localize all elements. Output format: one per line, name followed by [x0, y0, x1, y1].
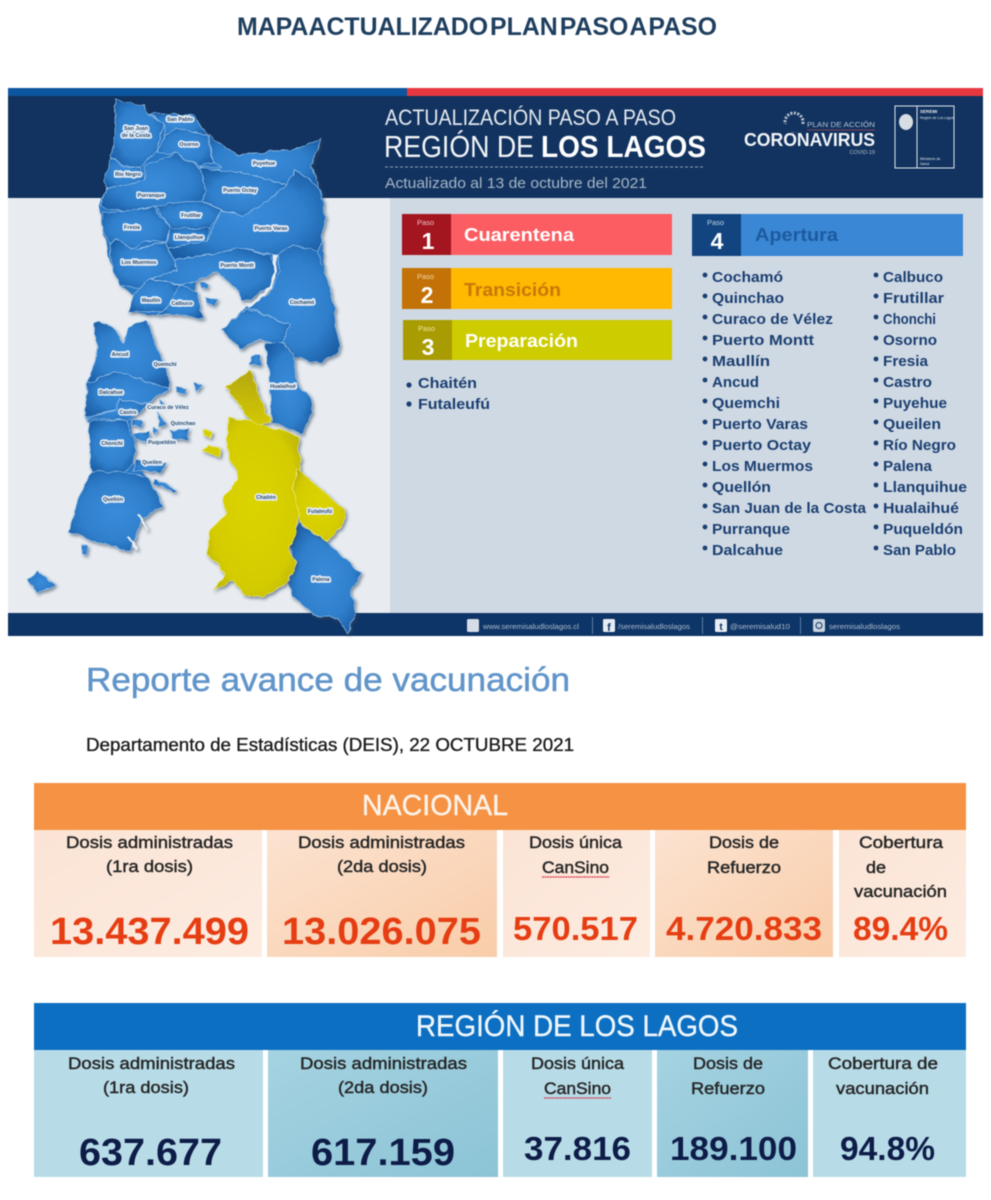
- list: comunas en paso 4, columna 1: Puerto Octay: [712, 437, 812, 454]
- map: commune labels: Puerto Montt: [220, 263, 254, 269]
- footer: redes sociales: @seremisalud10: [730, 624, 790, 631]
- map: commune labels: Los Muermos: [121, 260, 157, 266]
- panel: región de los lagos: [34, 1003, 966, 1177]
- heading: actualización paso a paso: [384, 105, 706, 192]
- banner backgrounds: [8, 88, 983, 636]
- stat: cansino región: 37.816: [524, 1130, 631, 1167]
- heading: actualización paso a paso: LOS LAGOS: [541, 129, 706, 164]
- step: paso 4 apertura: 4: [711, 228, 724, 254]
- map: commune labels: Quellón: [103, 497, 123, 503]
- list: comunas en paso 3: Chaitén: [418, 375, 477, 392]
- logo: plan de acción coronavirus: CORONAVIRUS: [744, 130, 875, 150]
- stat: cansino región: Dosis única: [531, 1054, 625, 1073]
- stat: cansino nacional: 570.517: [513, 910, 638, 947]
- map: northern communes, blue: [98, 100, 340, 363]
- map: commune labels: Fresia: [124, 225, 141, 231]
- step: paso 3 preparación: 3: [422, 334, 434, 360]
- list: comunas en paso 3: [406, 375, 490, 413]
- step: paso 2 transición: Paso: [417, 272, 434, 281]
- stat: dosis 1ra región: Dosis administradas: [68, 1054, 235, 1073]
- logo: seremi de salud: Ministerio de: [920, 157, 940, 161]
- stat: dosis 1ra nacional: Dosis administradas: [66, 833, 233, 852]
- logo: seremi de salud: [895, 106, 954, 168]
- map: commune labels: San Pablo: [167, 117, 194, 123]
- list: comunas en paso 4, columna 2: Chonchi: [883, 311, 936, 328]
- list: comunas en paso 4, columna 2: San Pablo: [883, 542, 956, 559]
- list: comunas en paso 4, columna 1: Maullín: [712, 353, 770, 370]
- stat: dosis 2da región: Dosis administradas: [300, 1054, 467, 1073]
- step: paso 2 transición: [402, 268, 672, 309]
- stat: cobertura nacional: Cobertura: [859, 833, 944, 852]
- footer: redes sociales: seremisaludloslagos: [829, 624, 901, 631]
- map: commune labels: Maullín: [142, 298, 160, 304]
- header: región de los lagos: REGIÓN DE LOS LAGOS: [416, 1010, 738, 1043]
- stat: cansino región: [503, 1050, 652, 1177]
- logo: plan de acción coronavirus: PLAN DE ACCIÓN: [807, 120, 875, 129]
- stat: refuerzo región: [657, 1050, 808, 1177]
- list: comunas en paso 4, columna 2: Fresia: [883, 353, 929, 370]
- list: comunas en paso 4, columna 2: Osorno: [883, 332, 937, 349]
- stat: cansino nacional: CanSino: [542, 858, 609, 877]
- footer: redes sociales: www.seremisaludloslagos.cl: [482, 624, 579, 631]
- step: paso 4 apertura: Apertura: [755, 225, 839, 245]
- map: commune labels: Llanquihue: [175, 235, 203, 241]
- stat: cobertura nacional: de: [866, 858, 886, 877]
- stat: dosis 2da región: 617.159: [311, 1132, 455, 1174]
- map: commune labels: Futaleufú: [308, 509, 332, 515]
- footer: redes sociales: t: [719, 622, 723, 633]
- panel: nacional: [34, 783, 966, 957]
- map: región de Los Lagos: [27, 100, 362, 633]
- list: comunas en paso 4, columna 1: [703, 269, 867, 559]
- stat: cobertura región: 94.8%: [840, 1130, 935, 1167]
- map: commune labels: Cochamó: [290, 300, 315, 306]
- stat: dosis 2da nacional: (2da dosis): [337, 857, 427, 876]
- stat: dosis 1ra nacional: 13.437.499: [50, 911, 249, 953]
- map: commune labels: Calbuco: [171, 301, 193, 307]
- stat: dosis 2da nacional: [267, 830, 497, 957]
- header: región de los lagos: [34, 1003, 966, 1050]
- list: comunas en paso 4, columna 1: Curaco de Vélez: [712, 311, 833, 328]
- map: commune labels: Purranque: [138, 193, 164, 199]
- logo: plan de acción coronavirus: [744, 113, 875, 156]
- list: comunas en paso 4, columna 2: Frutillar: [883, 290, 944, 307]
- step: paso 4 apertura: [692, 214, 963, 256]
- logo: seremi de salud: Región de Los Lagos: [920, 116, 954, 120]
- stat: refuerzo región: Refuerzo: [691, 1079, 765, 1098]
- stat: cobertura región: [813, 1050, 966, 1177]
- stat: refuerzo nacional: [655, 830, 833, 957]
- stat: cobertura región: Cobertura de: [828, 1054, 938, 1073]
- step: paso 1 cuarentena: Paso: [417, 218, 434, 227]
- stat: cansino región: CanSino: [544, 1079, 611, 1098]
- map: Chiloé and southern communes, blue: [27, 320, 362, 633]
- stat: cobertura nacional: vacunación: [854, 882, 947, 901]
- logo: plan de acción coronavirus: COVID-19: [850, 150, 875, 156]
- list: comunas en paso 4, columna 2: Palena: [883, 458, 933, 475]
- step: paso 1 cuarentena: 1: [422, 228, 435, 254]
- stat: dosis 2da región: (2da dosis): [338, 1078, 428, 1097]
- stat: dosis 2da nacional: 13.026.075: [282, 911, 481, 953]
- list: comunas en paso 4, columna 2: Puqueldón: [883, 521, 963, 538]
- step: paso 4 apertura: Paso: [707, 218, 724, 227]
- list: comunas en paso 4, columna 2: [874, 269, 967, 559]
- map: commune labels: Quinchao: [171, 421, 196, 427]
- map: commune labels: San Juan: [124, 126, 148, 132]
- logo: seremi de salud: SEREMI: [920, 109, 937, 114]
- stat: refuerzo región: Dosis de: [693, 1054, 763, 1073]
- map: commune labels: Palena: [312, 577, 331, 583]
- list: comunas en paso 4, columna 1: Ancud: [712, 374, 759, 391]
- map: commune labels: [99, 117, 332, 583]
- header: nacional: [34, 783, 966, 830]
- step: paso 3 preparación: Preparación: [465, 331, 578, 351]
- list: comunas en paso 4, columna 1: Purranque: [712, 521, 790, 538]
- heading: actualización paso a paso: ACTUALIZACIÓN PASO A PASO: [385, 105, 676, 130]
- footer: redes sociales: /seremisaludloslagos: [618, 624, 691, 631]
- stat: cobertura nacional: [839, 830, 966, 957]
- step: paso 2 transición: Transición: [464, 280, 561, 300]
- stat: refuerzo nacional: Dosis de: [709, 833, 779, 852]
- step: paso 3 preparación: [403, 320, 672, 360]
- list: comunas en paso 4, columna 2: Río Negro: [883, 437, 956, 454]
- map: commune labels: Río Negro: [115, 172, 142, 178]
- list: comunas en paso 4, columna 1: Dalcahue: [712, 542, 783, 559]
- list: comunas en paso 3: Futaleufú: [418, 396, 490, 413]
- title: MAPA ACTUALIZADO PLAN PASO A PASO: [237, 13, 717, 41]
- list: comunas en paso 4, columna 1: Los Muermos: [712, 458, 813, 475]
- stat: cansino nacional: [503, 830, 650, 957]
- stat: dosis 2da nacional: Dosis administradas: [298, 833, 465, 852]
- map: commune labels: Puqueldón: [148, 440, 176, 446]
- stat: dosis 1ra región: (1ra dosis): [103, 1078, 189, 1097]
- stat: cobertura región: vacunación: [836, 1079, 929, 1098]
- map: commune labels: Curaco de Vélez: [147, 405, 189, 411]
- stat: dosis 1ra región: 637.677: [79, 1132, 222, 1174]
- list: comunas en paso 4, columna 2: Calbuco: [883, 269, 943, 286]
- stat: dosis 1ra nacional: (1ra dosis): [106, 857, 193, 876]
- list: comunas en paso 4, columna 2: Hualaihué: [883, 500, 959, 517]
- stat: refuerzo nacional: 4.720.833: [666, 910, 822, 947]
- stat: cobertura nacional: 89.4%: [853, 910, 948, 947]
- map: commune labels: Hualaihué: [270, 384, 296, 390]
- list: comunas en paso 4, columna 2: Queilen: [883, 416, 941, 433]
- list: comunas en paso 4, columna 1: Quellón: [712, 479, 771, 496]
- logo: seremi de salud: Salud: [920, 162, 929, 166]
- step: paso 1 cuarentena: Cuarentena: [464, 225, 575, 245]
- map: commune labels: Puerto Varas: [255, 226, 287, 232]
- source line: Departamento de Estadísticas (DEIS), 22 OCTUBRE 2021: [86, 735, 574, 755]
- stat: cansino nacional: Dosis única: [529, 833, 623, 852]
- stat: dosis 1ra región: [34, 1050, 263, 1177]
- map: commune labels: Puyehue: [253, 161, 275, 167]
- map: commune labels: Puerto Octay: [223, 188, 257, 194]
- step: paso 3 preparación: Paso: [418, 324, 435, 333]
- stat: dosis 1ra nacional: [34, 830, 262, 957]
- header: nacional: NACIONAL: [362, 790, 508, 822]
- step: paso 2 transición: 2: [421, 282, 433, 308]
- map: Chaitén and Futaleufú, yellow: [202, 371, 345, 596]
- stat: refuerzo región: 189.100: [670, 1130, 797, 1167]
- map: commune labels: Castro: [119, 410, 137, 416]
- list: comunas en paso 4, columna 1: Puerto Varas: [712, 416, 808, 433]
- map: commune labels: Quemchi: [153, 362, 177, 368]
- map: commune labels: Osorno: [179, 142, 199, 148]
- map: commune labels: Chonchi: [101, 441, 123, 447]
- list: comunas en paso 4, columna 2: Puyehue: [883, 395, 947, 412]
- list: comunas en paso 4, columna 1: San Juan de la Costa: [712, 500, 867, 517]
- list: comunas en paso 4, columna 1: Quemchi: [712, 395, 780, 412]
- list: comunas en paso 4, columna 2: Llanquihue: [883, 479, 967, 496]
- map: commune labels: Dalcahue: [99, 390, 123, 396]
- stat: dosis 2da región: [268, 1050, 498, 1177]
- stat: refuerzo nacional: Refuerzo: [707, 858, 781, 877]
- footer: redes sociales: f: [607, 622, 611, 634]
- map: commune labels: de la Costa: [122, 133, 151, 139]
- list: comunas en paso 4, columna 1: Cochamó: [712, 269, 783, 286]
- map: commune labels: Queilen: [142, 460, 162, 466]
- map: commune labels: Frutillar: [181, 213, 202, 219]
- heading: actualización paso a paso: REGIÓN DE: [384, 129, 534, 164]
- list: comunas en paso 4, columna 1: Quinchao: [712, 290, 784, 307]
- map: commune labels: Chaitén: [256, 495, 276, 501]
- list: comunas en paso 4, columna 2: Castro: [883, 374, 932, 391]
- panel: paso a paso banner: [8, 88, 983, 636]
- heading: actualización paso a paso: Actualizado al 13 de octubre del 2021: [385, 175, 647, 192]
- heading: reporte avance de vacunación: Reporte avance de vacunación: [86, 661, 570, 698]
- map: commune labels: Ancud: [112, 352, 128, 358]
- step: paso 1 cuarentena: [402, 214, 672, 255]
- list: comunas en paso 4, columna 1: Puerto Montt: [712, 332, 814, 349]
- footer: redes sociales: [467, 617, 901, 634]
